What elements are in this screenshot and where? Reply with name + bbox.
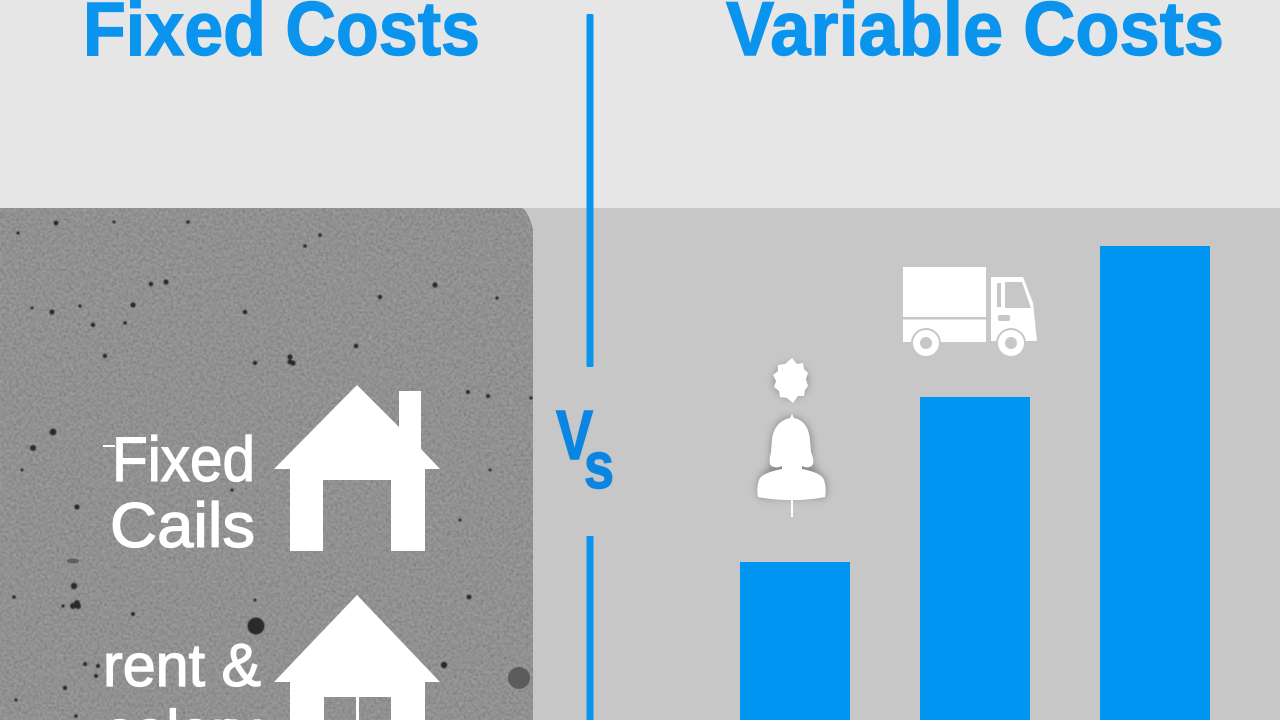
text: rent and salary: rent & [103, 632, 261, 699]
icon: house with chimney [274, 385, 440, 551]
text: Fixed Cails: Fixed [112, 425, 255, 495]
bar: medium [920, 397, 1030, 720]
text: Fixed Cails [103, 425, 255, 561]
divider: lower line [586, 536, 594, 720]
panel: fixed costs concrete [0, 208, 534, 720]
versus label: V [556, 396, 593, 474]
bar: low [740, 562, 850, 720]
background: lower band [0, 208, 1280, 720]
text: rent and salary [106, 643, 261, 720]
versus label: s [584, 428, 614, 502]
divider: upper line [586, 14, 594, 367]
text: Fixed Cails: Cails [110, 491, 255, 561]
bar: high [1100, 246, 1210, 720]
bar chart: variable costs [740, 246, 1210, 720]
versus label [556, 396, 614, 502]
icon: person pin with star [757, 358, 826, 517]
background: upper band [0, 0, 1280, 208]
icon: house with window [274, 595, 440, 720]
icon: delivery truck [903, 267, 1037, 358]
